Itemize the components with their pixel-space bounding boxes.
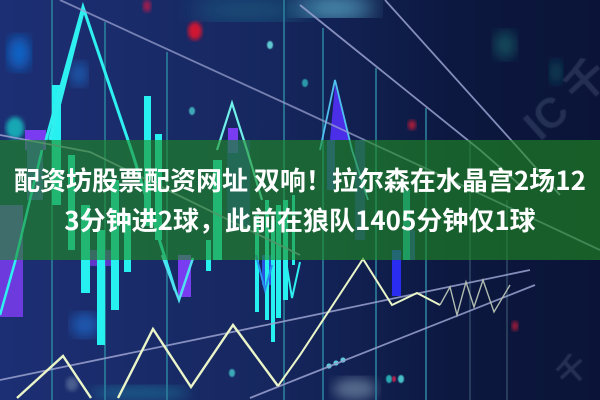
white zigzag line bbox=[17, 259, 510, 398]
purple candles bbox=[0, 85, 415, 317]
title text: 配资坊股票配资网址 双响！拉尔森在水晶宫2场12 bbox=[14, 161, 586, 198]
cyan zigzag lines bbox=[0, 7, 368, 315]
cyan candles bbox=[52, 85, 410, 345]
vertical grid lines bbox=[52, 0, 507, 400]
watermark: 千 bbox=[551, 349, 595, 393]
title text: 3分钟进2球，此前在狼队1405分钟仅1球 bbox=[64, 201, 536, 238]
title text bbox=[14, 161, 586, 238]
watermark bbox=[515, 50, 600, 393]
green title band bbox=[0, 140, 600, 260]
